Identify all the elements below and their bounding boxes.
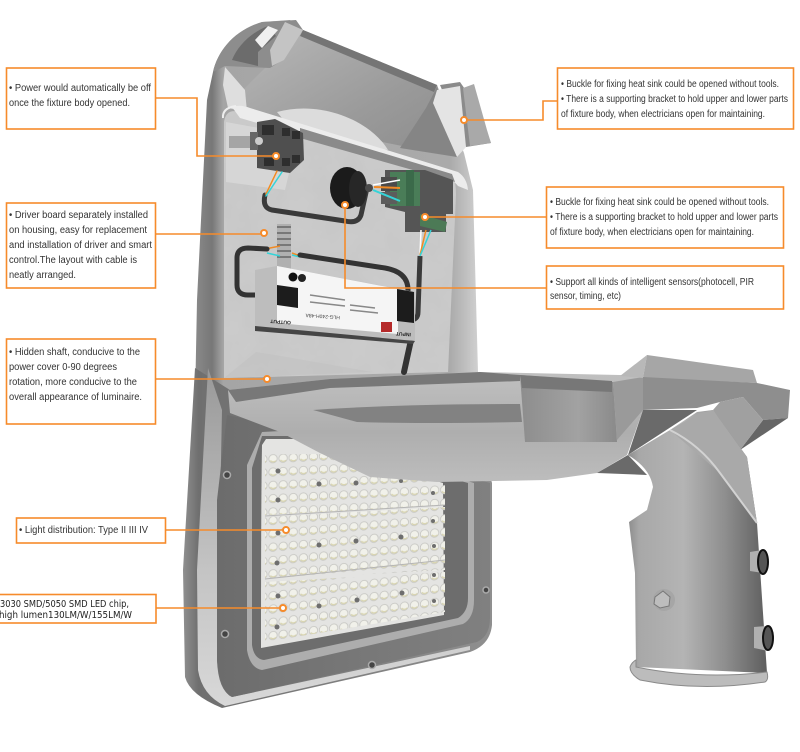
callout: hidden shaft	[6, 339, 270, 424]
relay block	[228, 119, 304, 173]
fixture: luminaire illustration	[183, 20, 790, 708]
callout: power off	[6, 68, 279, 159]
top left buckle	[213, 20, 303, 72]
lid interior	[223, 30, 457, 157]
callout: driver board: and installation of driver and smart	[9, 240, 152, 251]
callout: terminal buckle: of fixture body, when electricians open for maintaining.	[550, 227, 754, 238]
upper housing shell	[195, 20, 478, 402]
callout: top buckle	[461, 68, 794, 129]
callout: top buckle: of fixture body, when electricians open for maintaining.	[561, 109, 765, 120]
driver cables	[237, 248, 411, 372]
sensor holes	[274, 468, 436, 630]
LED driver: OUTPUT	[270, 318, 291, 325]
callout: sensors: • Support all kinds of intelligent sensors(photocell, PIR	[550, 277, 754, 288]
callout: driver board	[6, 203, 267, 288]
callout: LED chip: 3030 SMD/5050 SMD LED chip,	[0, 599, 129, 610]
cable from relay to sensor	[264, 171, 367, 222]
LED board	[261, 439, 445, 648]
callout: light distribution	[16, 518, 289, 543]
callout: power off: once the fixture body opened.	[9, 98, 130, 109]
callout: driver board: on housing, easy for replacement	[9, 225, 147, 236]
callout: sensors	[342, 202, 784, 309]
callout: driver board: control.The layout with cable is	[9, 255, 137, 266]
callout: driver board: neatly arranged.	[9, 270, 76, 281]
callout: light distribution: • Light distribution: Type II III IV	[19, 525, 148, 536]
mounting bolts	[653, 550, 773, 651]
LED module rows	[265, 454, 445, 642]
callout: hidden shaft: overall appearance of luminaire.	[9, 392, 142, 403]
pole mount	[628, 410, 768, 687]
frame screws	[222, 472, 489, 668]
cable from terminal block to driver	[410, 230, 431, 320]
LED driver	[255, 266, 415, 344]
LED driver: HLG-240H-48A	[305, 312, 340, 320]
callout: hidden shaft: power cover 0-90 degrees	[9, 362, 117, 373]
callout: LED chip	[0, 594, 286, 623]
right terminal block	[373, 170, 453, 232]
LED driver: INPUT	[396, 330, 411, 337]
sensor	[330, 167, 373, 209]
callout: power off: • Power would automatically be off	[9, 83, 151, 94]
callout: terminal buckle	[422, 187, 784, 248]
callout: terminal buckle: • Buckle for fixing heat sink could be opened without tools.	[550, 197, 769, 208]
callout: hidden shaft: rotation, more conducive to the	[9, 377, 137, 388]
wiring connector	[265, 224, 300, 272]
callout: sensors: sensor, timing, etc)	[550, 291, 621, 302]
callout: hidden shaft: • Hidden shaft, conducive to the	[9, 347, 140, 358]
callout: LED chip: high lumen130LM/W/155LM/W	[0, 610, 132, 621]
interior plate	[220, 100, 468, 382]
right buckle	[433, 82, 491, 157]
lower housing	[183, 368, 492, 708]
cover arm	[228, 355, 790, 482]
callout: driver board: • Driver board separately installed	[9, 210, 148, 221]
